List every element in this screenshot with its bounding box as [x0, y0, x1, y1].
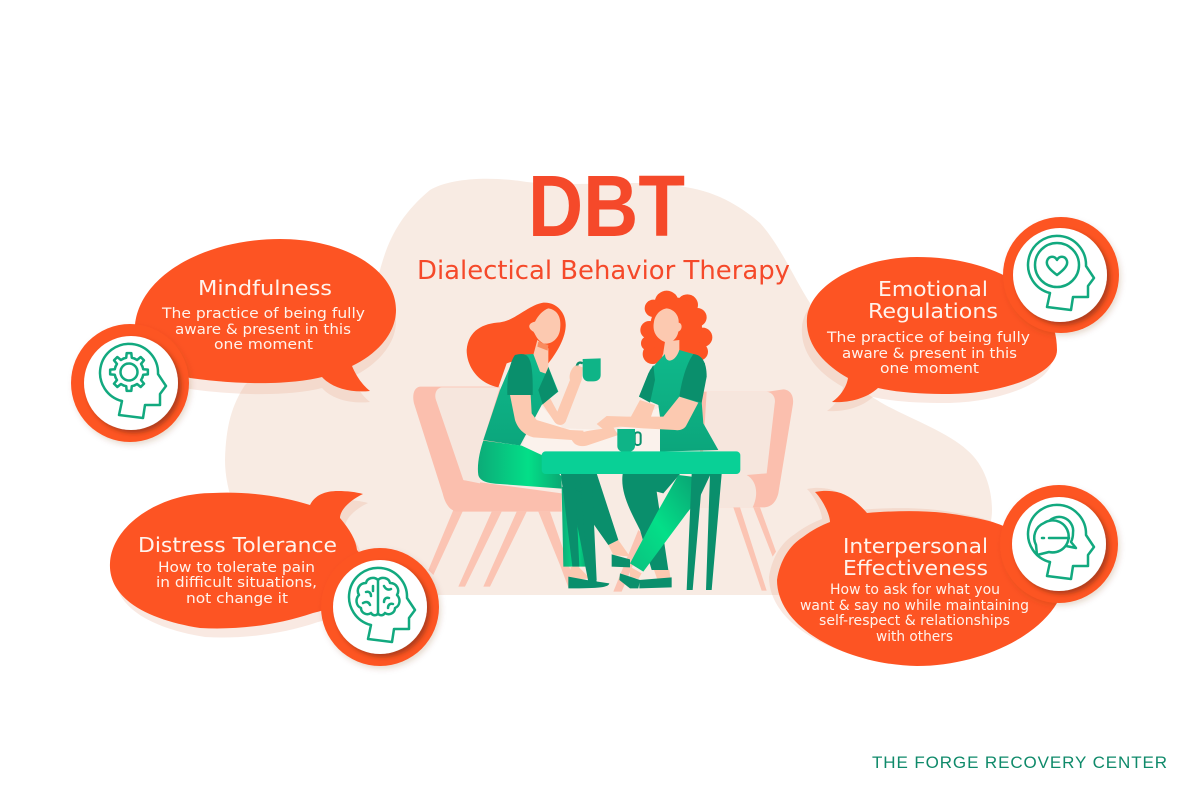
heading: Regulations — [868, 299, 998, 323]
sleeves — [507, 354, 533, 395]
panel: interpersonal effectiveness — [769, 485, 1118, 666]
description: The practice of being fully — [161, 306, 365, 322]
table top — [542, 451, 740, 474]
heading: Distress Tolerance — [138, 533, 337, 557]
description: one moment — [214, 337, 313, 353]
background blob — [225, 179, 992, 595]
ankle — [654, 570, 671, 579]
cream area between arms — [520, 405, 660, 454]
bubble — [777, 491, 1059, 666]
shirt — [639, 350, 718, 452]
neck — [533, 340, 548, 375]
heading: Interpersonal — [843, 534, 988, 558]
shoes — [639, 577, 672, 588]
left chair — [413, 387, 572, 587]
subtitle: Dialectical Behavior Therapy — [417, 256, 790, 286]
icon badge: gear head — [71, 324, 189, 442]
left woman — [467, 303, 630, 588]
description: not change it — [186, 591, 288, 607]
icon badge: brain head — [321, 548, 439, 666]
raised forearm — [543, 365, 583, 425]
heading: Mindfulness — [198, 276, 332, 300]
bubble shadow — [115, 500, 372, 637]
crossed leg — [630, 475, 700, 572]
bubble shadow — [769, 488, 1051, 663]
panel: mindfulness — [71, 239, 396, 442]
table legs — [561, 474, 722, 590]
arm — [510, 395, 585, 444]
skirt thigh — [478, 441, 562, 489]
description: in difficult situations, — [156, 575, 317, 591]
illustration: two women at a table — [413, 291, 793, 592]
face — [529, 308, 560, 344]
description: one moment — [880, 361, 979, 377]
panel: emotional regulations — [802, 217, 1119, 411]
bubble — [135, 239, 396, 391]
description: aware & present in this — [175, 322, 351, 338]
bubble — [807, 257, 1057, 402]
right chair — [613, 389, 793, 592]
hair — [467, 303, 566, 387]
dark thigh and calf — [561, 473, 618, 545]
icon badge: speech bubbles head — [1000, 485, 1118, 603]
forearm and hand — [597, 397, 698, 430]
description: How to ask for what you — [830, 582, 1000, 598]
sleeves — [679, 354, 707, 403]
footer brand: THE FORGE RECOVERY CENTER — [872, 753, 1167, 772]
dark thigh and calf — [622, 474, 680, 570]
bubble shadow — [802, 266, 1052, 411]
legs — [562, 487, 587, 567]
description: The practice of being fully — [826, 330, 1030, 346]
neck — [662, 340, 679, 366]
raised mug — [573, 358, 601, 381]
heading: Emotional — [878, 277, 988, 301]
right woman — [572, 291, 718, 588]
description: self-respect & relationships — [819, 613, 1010, 629]
shirt — [483, 354, 558, 446]
curly hair — [640, 291, 712, 364]
icon badge: heart head — [1003, 217, 1119, 333]
heading: Effectiveness — [843, 556, 988, 580]
panel: distress tolerance — [110, 491, 439, 666]
table mug — [617, 429, 641, 452]
bubble shadow — [135, 250, 396, 402]
description: How to tolerate pain — [158, 560, 315, 576]
face — [654, 308, 682, 343]
bubble — [110, 491, 367, 628]
upper arm — [630, 400, 655, 422]
description: with others — [876, 629, 953, 645]
description: want & say no while maintaining — [800, 598, 1029, 614]
description: aware & present in this — [842, 346, 1017, 362]
title: DBT — [528, 158, 685, 255]
